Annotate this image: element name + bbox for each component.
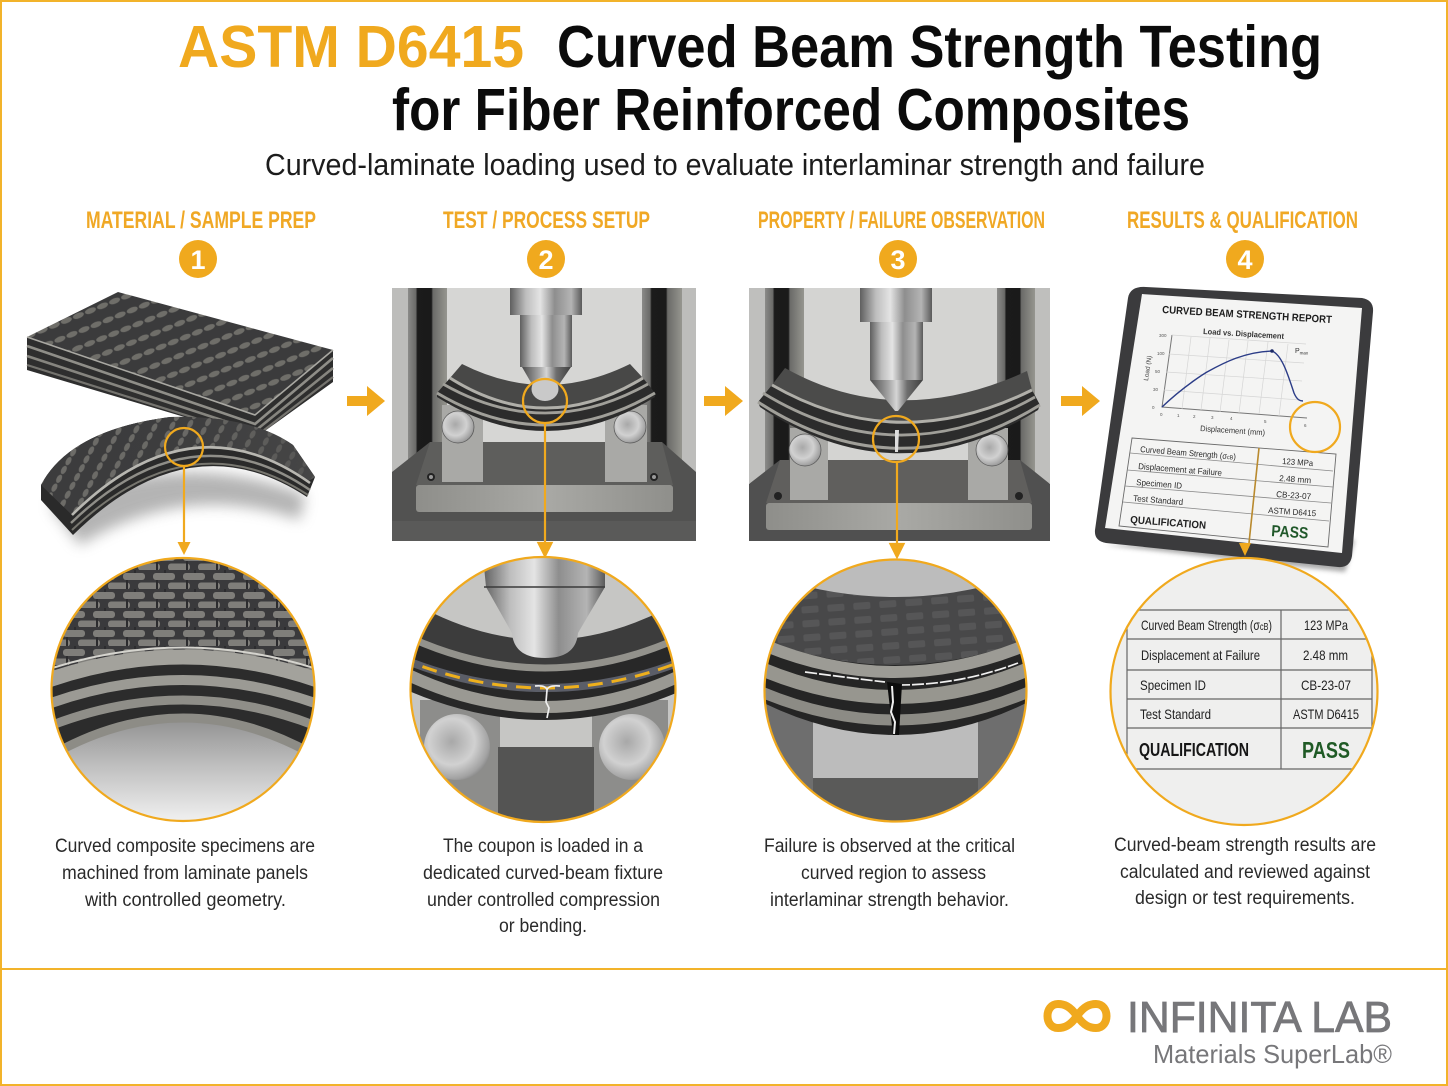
report table: 123 MPa (1282, 456, 1314, 468)
zoom arrow 3 (890, 462, 904, 557)
description 3: interlaminar strength behavior. (770, 890, 1009, 911)
footer divider (1, 968, 1447, 970)
panel 1: laminate panel and curved specimen (27, 292, 333, 545)
load vs displacement chart: 0 (1152, 405, 1155, 410)
panel 3: failed specimen photo (749, 288, 1050, 541)
subtitle: Curved-laminate loading used to evaluate interlaminar strength and failure (265, 147, 1205, 182)
description 4: design or test requirements. (1135, 888, 1355, 909)
step 2 heading: TEST / PROCESS SETUP (443, 207, 650, 234)
step 2 heading (443, 207, 650, 278)
callout ring on crack (873, 416, 919, 462)
detail circle 4: results table: CB-23-07 (1301, 677, 1351, 693)
step 1 heading: MATERIAL / SAMPLE PREP (86, 207, 316, 234)
report table (1119, 438, 1336, 547)
step 3 heading: 3 (890, 245, 906, 275)
step 4 heading: RESULTS & QUALIFICATION (1127, 207, 1358, 234)
detail circle 1: laminate edge (40, 556, 326, 825)
panel 2: test fixture photo (392, 288, 696, 541)
logo: INFINITA LAB (1127, 993, 1392, 1042)
step 3 heading (758, 207, 1045, 278)
report table: 2.48 mm (1279, 473, 1311, 485)
zoom arrow head 4 (1239, 543, 1251, 556)
detail circle 4: results table: 2.48 mm (1303, 647, 1348, 663)
description 1: with controlled geometry. (84, 890, 286, 911)
description 4 (1114, 835, 1376, 909)
detail circle 4: results table: Curved Beam Strength (σcB) (1141, 617, 1272, 633)
detail circle 4: results table: Specimen ID (1140, 677, 1206, 693)
load vs displacement chart: 50 (1155, 369, 1161, 374)
zoom arrow 1 (183, 466, 185, 543)
arrow 3 to 4 (1061, 386, 1100, 416)
report table: CB-23-07 (1276, 489, 1312, 501)
load vs displacement chart: Load (N) (1143, 355, 1154, 381)
load vs displacement chart: 3 (1211, 415, 1214, 420)
title: for Fiber Reinforced Composites (392, 77, 1190, 143)
icon: infinity (1048, 1004, 1106, 1028)
load vs displacement chart: 4 (1230, 416, 1233, 421)
detail circle 3: interlaminar crack (763, 558, 1028, 823)
report table: QUALIFICATION (1130, 514, 1206, 532)
logo: Materials SuperLab® (1153, 1039, 1392, 1069)
detail circle 2: loaded specimen (409, 556, 677, 824)
step 1 heading: 1 (190, 245, 206, 275)
panel 4: tablet with report (1095, 287, 1373, 572)
load vs displacement chart: Load vs. Displacement (1203, 327, 1285, 341)
description 4: calculated and reviewed against (1120, 862, 1371, 883)
load vs displacement chart: 30 (1153, 387, 1159, 392)
load vs displacement chart (1143, 327, 1309, 437)
zoom arrow 2 (538, 423, 552, 556)
detail circle 4: results table: Displacement at Failure (1141, 647, 1260, 663)
report table: Curved Beam Strength (σcB) (1140, 444, 1236, 462)
title: Curved Beam Strength Testing (557, 14, 1322, 80)
report table: Specimen ID (1136, 477, 1182, 491)
callout ring on specimen (165, 428, 203, 466)
report table: PASS (1271, 523, 1309, 543)
report title: CURVED BEAM STRENGTH REPORT (1162, 304, 1333, 326)
step 1 heading (86, 207, 316, 278)
detail circle 4: results table: QUALIFICATION (1139, 740, 1249, 760)
description 2: dedicated curved-beam fixture (423, 863, 663, 884)
description 3 (764, 836, 1015, 911)
description 1: Curved composite specimens are (55, 836, 315, 857)
arrow 2 to 3 (704, 386, 743, 416)
zoom arrow 4 (1249, 448, 1259, 543)
callout ring on loading nose (523, 379, 567, 423)
description 4: Curved-beam strength results are (1114, 835, 1376, 856)
load vs displacement chart: max (1300, 350, 1309, 356)
zoom arrow head 1 (178, 542, 190, 555)
description 2: or bending. (499, 916, 587, 937)
title: ASTM D6415 (178, 14, 524, 80)
logo (1048, 993, 1392, 1069)
arrow 1 to 2 (347, 386, 385, 416)
load vs displacement chart: P (1295, 348, 1300, 355)
step 4 heading: 4 (1237, 245, 1253, 275)
report table: Displacement at Failure (1138, 461, 1223, 478)
load vs displacement chart: 0 (1160, 412, 1163, 417)
description 2: under controlled compression (427, 890, 660, 911)
description 3: Failure is observed at the critical (764, 836, 1015, 857)
load vs displacement chart: 2 (1193, 414, 1196, 419)
load vs displacement chart: 6 (1304, 423, 1307, 428)
step 2 heading: 2 (538, 245, 554, 275)
load vs displacement chart: 100 (1157, 351, 1165, 356)
callout ring on curve end (1290, 402, 1340, 452)
report table: ASTM D6415 (1268, 505, 1317, 518)
report table: Test Standard (1133, 493, 1184, 507)
description 2: The coupon is loaded in a (443, 836, 643, 857)
load vs displacement chart: Displacement (mm) (1200, 424, 1266, 437)
load vs displacement chart: 5 (1264, 419, 1267, 424)
detail circle 4: results table: ASTM D6415 (1293, 706, 1359, 722)
step 4 heading (1127, 207, 1358, 278)
detail circle 4: results table (1110, 557, 1378, 827)
load vs displacement chart: 300 (1159, 333, 1167, 338)
description 1: machined from laminate panels (62, 863, 308, 884)
description 3: curved region to assess (801, 863, 986, 884)
detail circle 4: results table: PASS (1302, 737, 1350, 763)
title (178, 14, 1322, 143)
step 3 heading: PROPERTY / FAILURE OBSERVATION (758, 207, 1045, 234)
detail circle 4: results table: 123 MPa (1304, 617, 1348, 633)
description 2 (423, 836, 663, 937)
load vs displacement chart: 1 (1177, 413, 1180, 418)
description 1 (55, 836, 315, 911)
detail circle 4: results table: Test Standard (1140, 706, 1211, 722)
